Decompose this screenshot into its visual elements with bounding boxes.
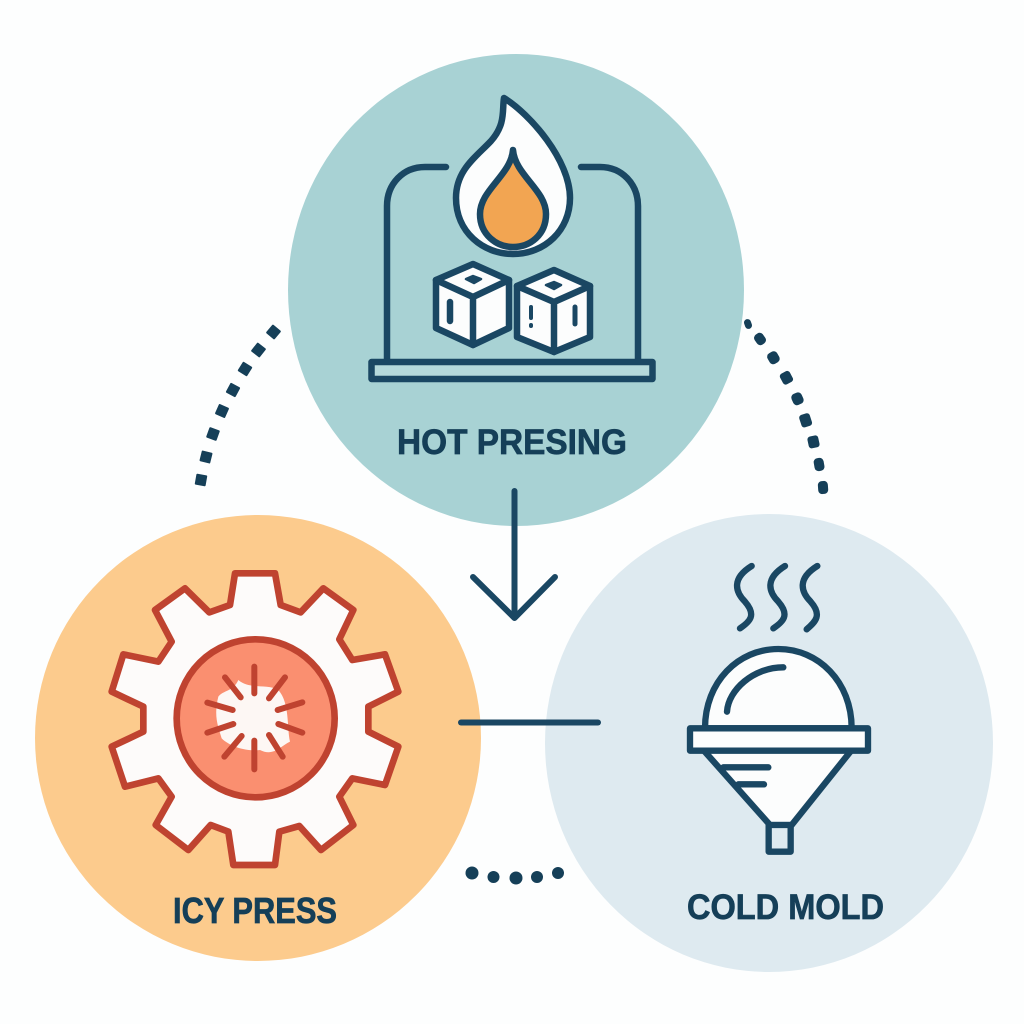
dome [705, 649, 852, 728]
label: icy press: ICY PRESS [173, 890, 337, 931]
circle: hot pressing background [288, 54, 744, 526]
steam lines [737, 566, 817, 629]
connector: left dotted arc [195, 324, 281, 486]
connector: dots between lower circles [466, 866, 564, 884]
icon: steaming funnel mold [690, 566, 868, 852]
dome highlight [727, 667, 783, 712]
panel: icy press [35, 515, 481, 961]
circle: cold mold background [545, 514, 993, 972]
flange [690, 728, 868, 751]
funnel level lines [723, 767, 768, 784]
label: hot presing: HOT PRESING [397, 423, 627, 462]
gear hub [177, 639, 335, 797]
circle: icy press background [35, 515, 481, 961]
press frame left [387, 167, 446, 360]
press base plate [372, 362, 652, 379]
icon: press frame with flame and ice cubes [372, 98, 652, 379]
burst centre [216, 680, 290, 752]
icon: ice cube left [436, 264, 509, 345]
funnel spout [769, 825, 791, 852]
icon: ice cube right [517, 270, 590, 352]
press frame right [581, 167, 638, 360]
label: cold mold: COLD MOLD [687, 888, 884, 927]
gear outline [112, 573, 398, 865]
icon: flame [456, 98, 570, 254]
burst rays [207, 667, 302, 769]
icon: gear with burst [112, 573, 398, 865]
connector: icy press to cold mold [461, 720, 598, 726]
funnel body [703, 750, 852, 825]
connector: right dotted arc [743, 318, 828, 494]
panel: cold mold [545, 514, 993, 972]
panel: hot pressing [288, 54, 744, 526]
arrow: down from hot presing [473, 491, 555, 618]
